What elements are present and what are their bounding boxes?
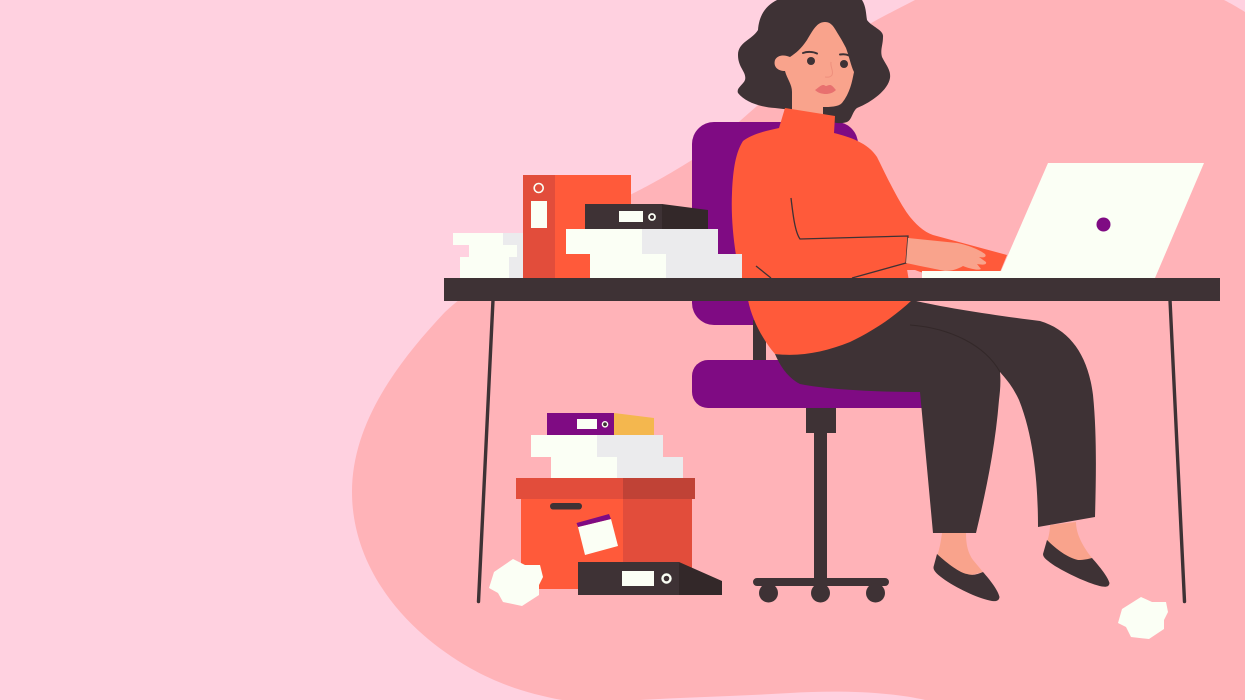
binder side (679, 562, 722, 595)
binder ring (662, 574, 670, 582)
eyebrows (803, 52, 849, 56)
paper stack under binder (566, 229, 742, 278)
left shoe (933, 554, 1000, 601)
spine ring (534, 184, 543, 192)
binder cover (555, 175, 631, 278)
storage box with files (516, 413, 695, 589)
chair connector (753, 320, 766, 365)
background blob (352, 0, 1245, 700)
laptop screen (998, 163, 1204, 278)
desk (444, 278, 1220, 602)
binder label (622, 571, 654, 586)
binder side (662, 204, 708, 229)
desk top (444, 278, 1220, 301)
spine label (531, 201, 547, 228)
box body, front (521, 499, 623, 589)
binder ring (649, 214, 655, 220)
right ankle (1047, 522, 1092, 563)
far arm sleeve (880, 190, 1007, 276)
chair stem and base (753, 408, 889, 586)
laptop (922, 163, 1204, 278)
trousers (775, 300, 1096, 533)
red binder (523, 175, 631, 278)
laptop base (922, 271, 1155, 278)
dark binder on desk (585, 204, 708, 229)
chair (692, 122, 925, 602)
laptop logo (1096, 218, 1110, 232)
box body, side (623, 499, 692, 589)
chair seat (692, 360, 925, 408)
chair back (692, 122, 858, 325)
papers on box (531, 435, 683, 478)
right shoe (1043, 540, 1110, 587)
crumpled paper right (1118, 597, 1168, 639)
face and neck (775, 22, 854, 118)
paper sheets, light side (453, 233, 517, 278)
nose (825, 62, 833, 77)
left ankle (937, 533, 983, 578)
chair wheels (759, 584, 885, 602)
sticky note (576, 514, 618, 555)
lips (815, 85, 836, 94)
hair (738, 0, 890, 123)
paper sheets, shaded side (503, 233, 523, 278)
binder spine (523, 175, 555, 278)
purple binder (547, 413, 654, 435)
binder label (619, 211, 643, 222)
hand (906, 238, 986, 271)
lower sheets (590, 254, 666, 278)
loose paper stack on desk (453, 233, 523, 278)
dark binder on floor (578, 562, 722, 595)
box lid, side (623, 478, 695, 499)
binder spine (585, 204, 662, 229)
trouser crease (910, 325, 1000, 372)
upper sheets (566, 229, 642, 254)
desk legs (478, 300, 1184, 602)
crumpled paper left (489, 559, 543, 606)
binder spine (578, 562, 679, 595)
sweater fold lines (756, 198, 908, 278)
eyes (807, 57, 848, 68)
box handle (550, 503, 582, 510)
sweater (732, 108, 925, 355)
box lid, front (516, 478, 623, 499)
